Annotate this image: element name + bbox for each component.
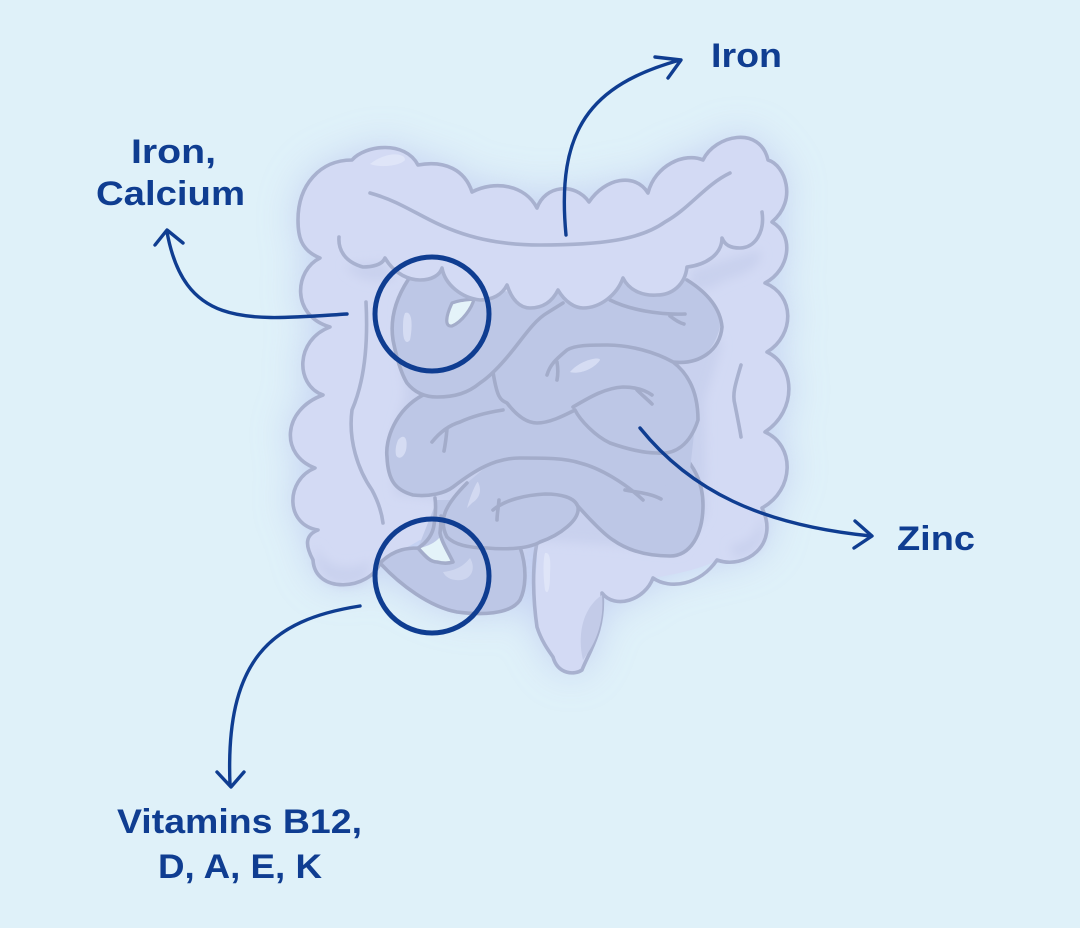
illustration: intestines bbox=[290, 137, 789, 673]
label: Vitamins: Vitamins B12, bbox=[117, 803, 362, 841]
label: Iron: Iron bbox=[711, 37, 782, 75]
arrow: to Vitamins bbox=[217, 606, 360, 787]
small intestine bbox=[380, 270, 722, 614]
arrow: to Iron, Calcium bbox=[155, 230, 347, 318]
descending colon fold bbox=[734, 365, 741, 437]
label: Zinc: Zinc bbox=[897, 520, 975, 558]
arrow: to Zinc bbox=[640, 428, 872, 548]
upper left loop bbox=[392, 270, 563, 397]
large intestine bbox=[290, 137, 789, 673]
upper right loop bbox=[493, 280, 720, 453]
label: Vitamins bbox=[117, 803, 362, 886]
label: Iron, Calcium: Iron, bbox=[131, 133, 216, 171]
label: Vitamins: D, A, E, K bbox=[158, 848, 322, 886]
appendix shading bbox=[581, 595, 602, 660]
small intestine shadow bbox=[392, 290, 722, 590]
transverse fold bbox=[370, 173, 730, 245]
glow behind intestines bbox=[290, 137, 789, 673]
terminal ileum bbox=[380, 500, 525, 614]
lower loop bbox=[443, 440, 703, 556]
colon scallops over small intestine bbox=[339, 173, 763, 308]
label: Iron, Calcium bbox=[96, 133, 245, 213]
label: Iron, Calcium: Calcium bbox=[96, 175, 245, 213]
colon highlight bbox=[370, 154, 405, 166]
middle loop bbox=[387, 340, 697, 500]
ascending colon fold bbox=[351, 302, 383, 523]
highlight circle: lower bbox=[375, 519, 489, 633]
highlight circle: upper bbox=[375, 257, 489, 371]
arrow: to Iron bbox=[564, 57, 681, 235]
colon shading bbox=[316, 250, 764, 585]
